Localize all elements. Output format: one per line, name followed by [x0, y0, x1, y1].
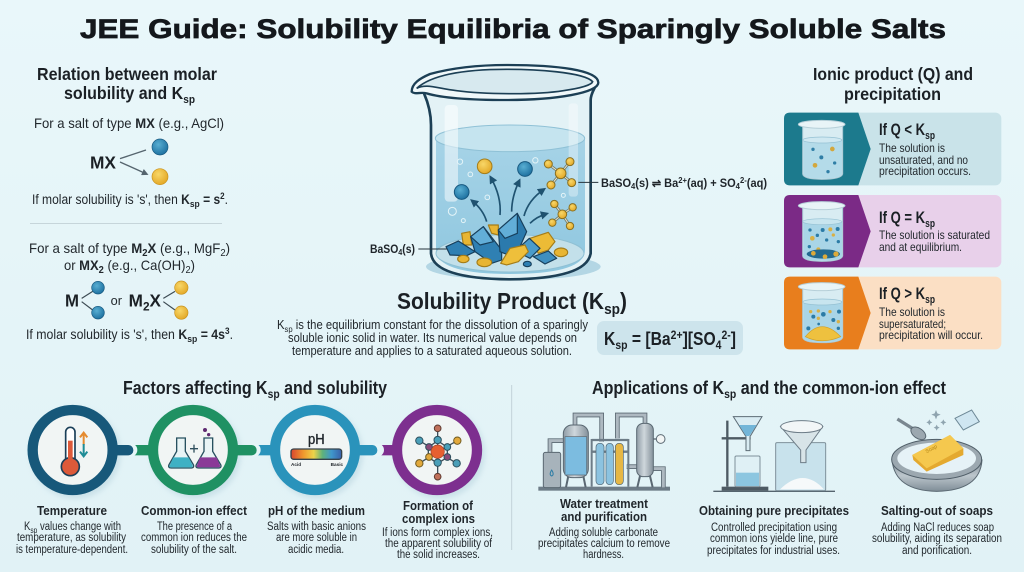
factor: temperature [16, 503, 128, 556]
card: Q greater than Ksp [784, 277, 1001, 349]
heading: factors: sp [268, 387, 280, 401]
text: Ksp = 4s cubed: 3 [225, 326, 230, 336]
heading: applications: sp [724, 387, 736, 401]
label: dissolution equation: 4 [736, 182, 740, 191]
factor: pH of the medium: pH of the medium [268, 503, 365, 518]
text: Ksp = s squared: If molar solubility is 's', then K [32, 192, 195, 207]
panel: relation between molar solubility and Ksp [26, 64, 233, 345]
factor: temperature: is temperature-dependent. [16, 544, 128, 556]
crystals [446, 213, 568, 267]
icon: filtration of precipitate [713, 417, 835, 491]
text: M2X salt type: (e.g., Ca(OH) [104, 257, 185, 273]
formula box: Ksp expression: = [Ba [628, 329, 672, 349]
application: water treatment: Water treatment [560, 496, 649, 511]
card: Q greater than Ksp: If Q > K [879, 284, 939, 303]
text: Ksp definition: K [277, 318, 285, 332]
heading: Solubility Product (Ksp): Solubility Product (K [397, 288, 624, 314]
icon: complex ion [397, 410, 477, 490]
text: Ksp = 4s cubed: sp [187, 334, 197, 345]
card: Q equals Ksp: and at equilibrium. [879, 240, 962, 254]
heading: relation: solubility and K [64, 83, 194, 103]
factor: temperature: sp [30, 526, 38, 535]
label: dissolution equation: 2+ [678, 176, 687, 185]
icon: soap in salting bowl: Soap [925, 444, 939, 455]
text: MX salt type: For a salt of type MX (e.g., AgCl) [34, 115, 224, 131]
heading: applications: Applications of K [592, 377, 744, 398]
card: Q less than Ksp: unsaturated, and no [879, 153, 968, 167]
application: salting-out of soaps: Salting-out of soaps [881, 503, 993, 518]
heading: relation: sp [183, 94, 195, 106]
icon: pH scale: Basic [331, 462, 343, 467]
icon: water treatment plant [538, 415, 670, 491]
diagram: MX dissociation [90, 139, 168, 185]
factor: common-ion effect: solubility of the salt. [151, 544, 237, 556]
text: M2X salt type: 2 [220, 248, 226, 259]
card: Q greater than Ksp: precipitation will occur. [879, 328, 983, 342]
application: water treatment: Adding soluble carbonate [549, 527, 658, 539]
heading: Solubility Product (Ksp): ) [620, 288, 627, 314]
factor: pH of the medium: acidic media. [288, 544, 344, 556]
application: water treatment: precipitates calcium to remove [538, 538, 670, 550]
text: Ksp definition: sp [285, 324, 293, 334]
factor: common-ion effect: common ion reduces the [141, 532, 247, 544]
factor: pH of the medium: are more soluble in [276, 532, 357, 544]
factor: temperature: temperature, as solubility [17, 532, 126, 544]
factor: temperature: K [24, 521, 32, 533]
card: Q less than Ksp: The solution is [879, 141, 945, 155]
panel: applications of Ksp [538, 377, 1002, 561]
card: Q equals Ksp: If Q = K [879, 208, 939, 227]
heading: factors: Factors affecting K [123, 377, 291, 398]
factor: complex ions: complex ions [402, 511, 475, 526]
card: Q equals Ksp [784, 195, 1001, 267]
formula box: Ksp expression: 2+ [671, 328, 683, 342]
heading: Solubility Product (Ksp): sp [604, 301, 620, 318]
text: Ksp definition: soluble ionic solid in water. Its numerical value depends on [288, 331, 577, 345]
application: salting-out of soaps [872, 503, 1002, 557]
formula box: Ksp expression: ][SO [683, 329, 716, 349]
dissolution arrows [472, 177, 547, 223]
factor: temperature: values change with [37, 521, 121, 533]
diagram: M2X dissociation: X [150, 291, 161, 311]
formula box: Ksp expression: sp [615, 338, 628, 352]
card: Q greater than Ksp: sp [925, 294, 935, 306]
factor: complex ions: If ions form complex ions, [382, 527, 493, 539]
beaker rim [412, 65, 598, 100]
factor: complex ions: the apparent solubility of [385, 538, 493, 550]
icon: common-ion flasks [153, 410, 233, 490]
icon: soap in salting bowl [892, 410, 982, 491]
diagram: MX dissociation: MX [90, 152, 116, 172]
application: water treatment [538, 496, 670, 561]
factor: pH of the medium [267, 503, 366, 556]
application: salting-out of soaps: solubility, aiding its separation [872, 533, 1002, 545]
text: Ksp definition: temperature and applies to a saturated aqueous solution. [292, 344, 572, 358]
card: Q less than Ksp: precipitation occurs. [879, 164, 971, 178]
formula box: Ksp expression: 4 [716, 338, 722, 352]
application: pure precipitates: Obtaining pure precipitates [699, 503, 849, 518]
label: dissolution equation: BaSO [601, 178, 632, 190]
icon: temperature [33, 410, 113, 490]
text: M2X salt type: (e.g., MgF [160, 240, 224, 256]
factor: common-ion effect [141, 503, 248, 556]
heading: applications: and the common-ion effect [736, 377, 946, 398]
card: Q less than Ksp [784, 113, 1001, 185]
card: Q equals Ksp: sp [925, 218, 935, 230]
text: Ksp = s squared: . [225, 192, 228, 207]
card: Q less than Ksp: If Q < K [879, 120, 939, 139]
application: water treatment: and purification [561, 509, 647, 524]
label: dissolution equation: 2- [740, 176, 747, 185]
text: M2X salt type: 2 [185, 265, 191, 276]
text: M2X salt type: ) [226, 240, 230, 256]
application: salting-out of soaps: Adding NaCl reduces soap [881, 522, 994, 534]
application: pure precipitates [699, 503, 849, 557]
leader lines [418, 182, 598, 249]
card: Q greater than Ksp: supersaturated; [879, 317, 946, 331]
text: Ksp definition [277, 318, 589, 358]
card: Q equals Ksp: The solution is saturated [879, 228, 990, 242]
factor: common-ion effect: The presence of a [157, 521, 232, 533]
application: pure precipitates: precipitates for industrial uses. [707, 545, 840, 557]
text: Ksp = s squared: 2 [220, 191, 225, 201]
icon: pH scale: Acid [291, 462, 301, 467]
text: Ksp = 4s cubed: = 4s [197, 327, 225, 342]
text: Ksp definition: is the equilibrium constant for the dissolution of a sparingly [293, 318, 589, 332]
text: M2X salt type: ) [191, 257, 195, 273]
formula box: Ksp expression: 2- [721, 328, 731, 342]
text: M2X salt type: 2 [99, 265, 104, 276]
formula box: Ksp expression [597, 321, 743, 355]
diagram: M2X dissociation: M [129, 291, 143, 311]
text: Ksp = s squared: sp [190, 199, 200, 210]
label: dissolution equation: (aq) [747, 178, 767, 190]
formula box: Ksp expression: K [604, 329, 617, 349]
panel: ionic product and precipitation [784, 64, 1001, 349]
heading: relation [37, 64, 217, 106]
card: Q less than Ksp: sp [925, 130, 935, 142]
factor: complex ions [382, 498, 493, 561]
title: JEE Guide: Solubility Equilibria of Sparingly Soluble Salts [80, 14, 946, 44]
factor: common-ion effect: Common-ion effect [141, 503, 248, 518]
label: dissolution equation: 4 [631, 182, 636, 191]
formula box: Ksp expression: ] [731, 329, 736, 349]
factor: complex ions: the solid increases. [397, 549, 480, 561]
text: M2X salt type [29, 240, 230, 276]
text: Ksp = 4s cubed: . [230, 327, 233, 342]
icon: pH scale: pH [308, 432, 325, 448]
illustration: beaker with dissolving BaSO4 [412, 65, 601, 280]
diagram: M2X dissociation: 2 [143, 300, 150, 314]
application: salting-out of soaps: and porification. [902, 545, 972, 557]
factor: temperature: Temperature [37, 503, 107, 518]
icon: pH scale [275, 410, 355, 490]
text: Ksp = s squared: = s [200, 192, 220, 207]
text: Ksp = 4s cubed: If molar solubility is 's', then K [26, 327, 189, 342]
dissolved ions [448, 158, 576, 230]
application: water treatment: hardness. [583, 549, 624, 561]
heading: ionic product: Ionic product (Q) and [813, 64, 973, 84]
diagram: M2X dissociation: or [111, 294, 122, 308]
diagram: M2X dissociation [65, 281, 188, 319]
card: Q greater than Ksp: The solution is [879, 305, 945, 319]
heading: relation: Relation between molar [37, 64, 217, 84]
label: BaSO4(s): BaSO [370, 244, 401, 256]
diagram: M2X dissociation: M [65, 291, 79, 311]
text: M2X salt type: X [148, 240, 157, 256]
text: M2X salt type: 2 [142, 248, 148, 259]
application: pure precipitates: common ions yielde line, pure [710, 533, 838, 545]
application: pure precipitates: Controlled precipitation using [711, 522, 837, 534]
factor: pH of the medium: Salts with basic anions [267, 521, 366, 533]
text: M2X salt type: For a salt of type M [29, 240, 143, 256]
label: BaSO4(s): (s) [402, 244, 415, 256]
heading: ionic product [813, 64, 973, 104]
label: dissolution equation: (s) ⇌ Ba [635, 178, 679, 190]
factor: complex ions: Formation of [403, 498, 474, 513]
label: dissolution equation: (aq) + SO [687, 178, 736, 190]
heading: ionic product: precipitation [844, 84, 941, 104]
panel: factors affecting Ksp [16, 377, 493, 561]
heading: factors: and solubility [280, 377, 388, 398]
icon ring chain [30, 408, 485, 499]
label: BaSO4(s): 4 [398, 248, 403, 257]
text: M2X salt type: or MX [64, 257, 100, 273]
